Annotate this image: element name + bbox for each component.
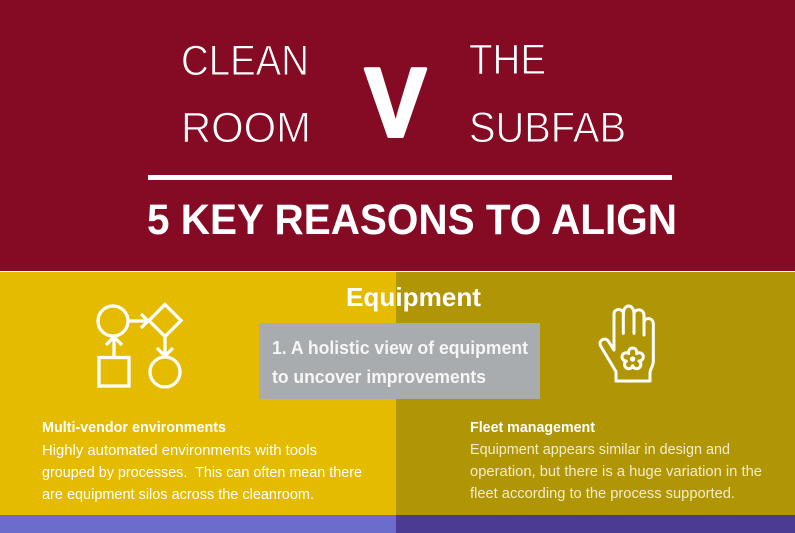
subtitle: 5 KEY REASONS TO ALIGN bbox=[147, 196, 677, 244]
text block: multi-vendor environments: Highly automated environments with tools bbox=[42, 443, 317, 459]
panel: next section left bbox=[0, 515, 396, 533]
title: clean room: ROOM bbox=[181, 104, 311, 152]
panel: next section right bbox=[396, 515, 795, 533]
text block: fleet management: Fleet management bbox=[470, 420, 595, 436]
panel: header bbox=[0, 0, 795, 271]
title: clean room: CLEAN bbox=[181, 37, 309, 85]
text block: fleet management bbox=[470, 420, 762, 502]
icon: process flow bbox=[98, 304, 181, 387]
text block: multi-vendor environments: are equipment silos across the cleanroom. bbox=[42, 487, 314, 503]
title: clean room bbox=[181, 37, 311, 152]
heading: equipment: Equipment bbox=[346, 282, 481, 312]
icon: hand with flower bbox=[600, 306, 653, 381]
text block: fleet management: fleet according to the process supported. bbox=[470, 486, 735, 502]
title: the subfab bbox=[469, 36, 626, 152]
header bottom line bbox=[0, 271, 795, 272]
title: large V: V bbox=[364, 48, 426, 158]
text block: fleet management: Equipment appears similar in design and bbox=[470, 442, 730, 458]
text block: fleet management: operation, but there is a huge variation in the bbox=[470, 464, 762, 480]
text block: multi-vendor environments: grouped by processes. This can often mean there bbox=[42, 465, 362, 481]
title rule bbox=[148, 175, 672, 180]
title: the subfab: SUBFAB bbox=[469, 104, 626, 152]
callout: reason 1: 1. A holistic view of equipment bbox=[272, 338, 528, 358]
title: the subfab: THE bbox=[469, 36, 546, 84]
text block: multi-vendor environments bbox=[42, 420, 362, 503]
text block: multi-vendor environments: Multi-vendor environments bbox=[42, 420, 226, 436]
panel: equipment left bbox=[0, 272, 396, 515]
callout: reason 1: to uncover improvements bbox=[272, 367, 486, 387]
panel: equipment right bbox=[396, 272, 795, 515]
callout: reason 1 bbox=[259, 323, 540, 399]
